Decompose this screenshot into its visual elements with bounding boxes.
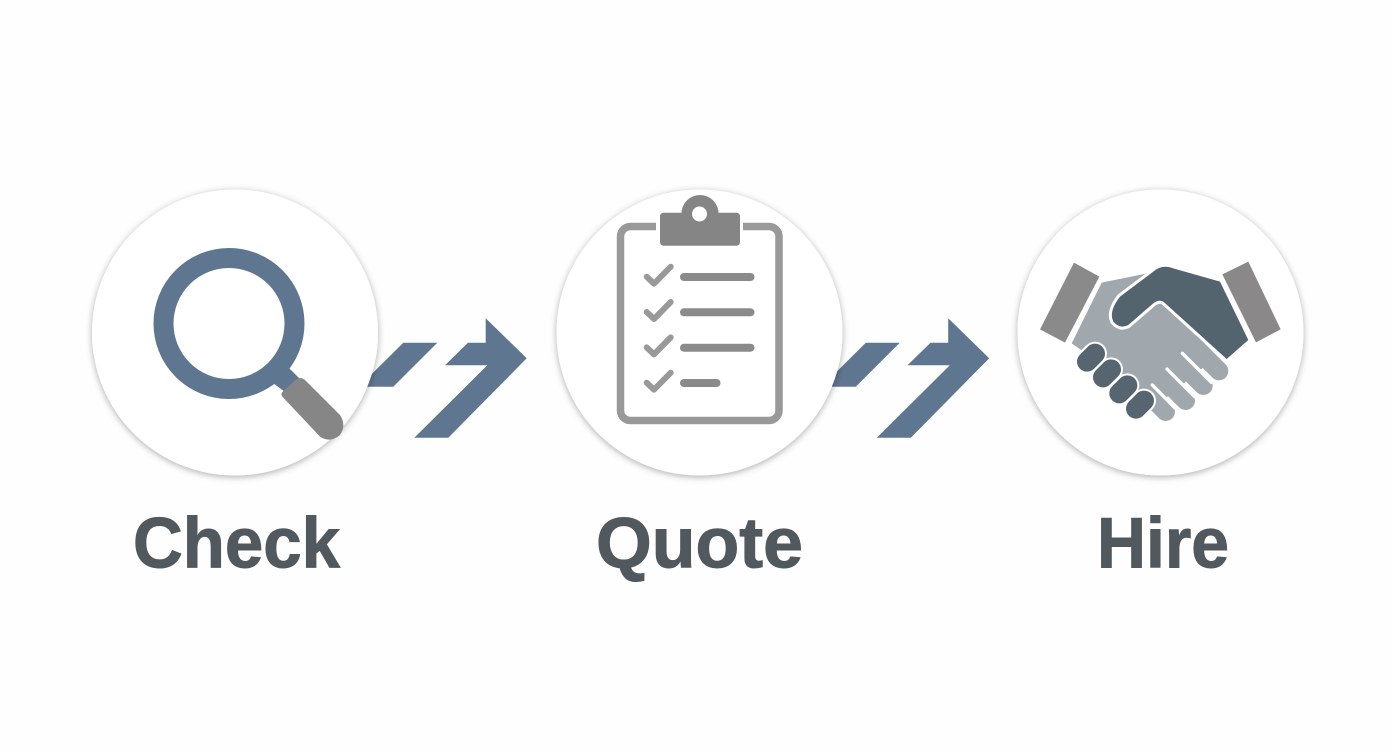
arrow: quote to hire — [822, 318, 989, 438]
circle: hire background — [1018, 190, 1304, 476]
circle: quote background — [556, 190, 842, 476]
arrow: check to quote — [359, 318, 527, 438]
panel: quote — [556, 190, 842, 584]
icon: handshake — [1040, 262, 1281, 412]
panel: check — [92, 190, 378, 584]
label: check: Check — [133, 504, 340, 584]
circle: check background — [92, 190, 378, 476]
icon: magnifying glass — [164, 258, 343, 440]
label: hire: Hire — [1097, 504, 1229, 584]
icon: clipboard checklist — [620, 195, 779, 420]
panel: hire — [1018, 190, 1304, 584]
label: quote: Quote — [596, 504, 803, 584]
